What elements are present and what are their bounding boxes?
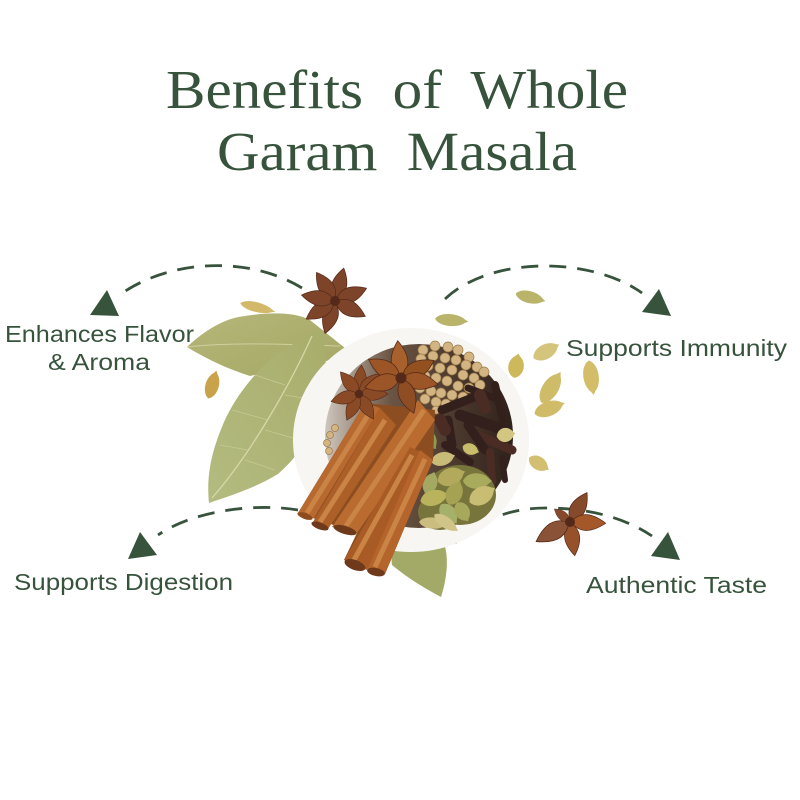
icon: cinnamon stick ends [296,510,386,578]
title: Benefits of Whole [166,59,628,120]
icon: white bowl [293,328,529,552]
title [166,59,628,182]
arrow: bottom right [455,508,680,560]
icon: star anise in bowl left [329,365,388,423]
label: enhances flavor and aroma [5,321,194,375]
arrow: bottom left [128,507,298,559]
icon: cloves [440,385,512,482]
title: Garam Masala [217,121,577,182]
label: supports digestion: Supports Digestion [14,569,233,595]
arrow: top right [445,266,671,316]
icon: cinnamon sticks [298,400,435,574]
icon: star anise top left [300,266,369,336]
label: enhances flavor and aroma: Enhances Flavor [5,321,194,347]
spice illustration [187,266,606,597]
icon: bottom bay leaf [392,525,447,597]
label: authentic taste: Authentic Taste [586,572,767,598]
icon: front bay leaf [208,330,326,503]
icon: coriander seeds [324,341,489,454]
icon: star anise in bowl right [363,340,439,416]
arrow: top left [90,266,302,316]
label: supports immunity: Supports Immunity [566,335,788,361]
icon: star anise bottom right [532,489,606,557]
icon: loose cardamom pods [202,288,601,475]
icon: back bay leaf [187,313,345,376]
icon: green cardamom in bowl [416,425,516,536]
label: enhances flavor and aroma: & Aroma [48,349,150,375]
